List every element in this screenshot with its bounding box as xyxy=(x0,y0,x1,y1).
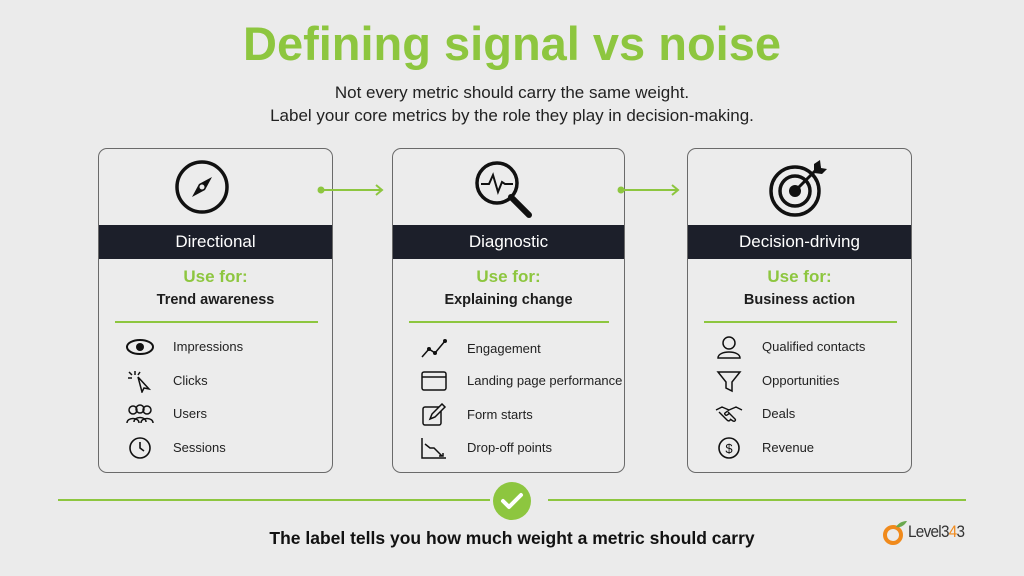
arrow 1 xyxy=(318,184,384,196)
icon: compass xyxy=(175,160,229,214)
panel: diagnostic: Diagnostic xyxy=(469,232,548,251)
item list: Drop-off points xyxy=(467,440,552,455)
subtitle xyxy=(270,83,754,125)
title: Defining signal vs noise xyxy=(243,17,781,70)
panel: decision-driving xyxy=(687,148,912,473)
item list: $ xyxy=(725,441,733,456)
item list: Form starts xyxy=(467,407,533,422)
footer message: The label tells you how much weight a metric should carry xyxy=(269,528,755,548)
panel: directional: Trend awareness xyxy=(157,292,274,308)
subtitle: Not every metric should carry the same weight. xyxy=(335,83,689,102)
item list: Deals xyxy=(762,406,795,421)
panel: decision-driving: Decision-driving xyxy=(739,232,860,251)
item list: Users xyxy=(173,406,207,421)
icon: magnifier xyxy=(475,161,532,218)
item list: Engagement xyxy=(467,341,541,356)
panel: directional: Use for: xyxy=(183,267,248,286)
item list: Qualified contacts xyxy=(762,339,865,354)
icon: check xyxy=(493,482,531,520)
item list: Landing page performance xyxy=(467,373,622,388)
item list xyxy=(716,336,865,459)
item list xyxy=(421,339,622,459)
item list: Revenue xyxy=(762,440,814,455)
panel: decision-driving: Business action xyxy=(744,292,855,308)
logo: Level343 xyxy=(908,522,964,541)
item list xyxy=(126,339,243,459)
item list: Opportunities xyxy=(762,373,839,388)
divider with check icon xyxy=(58,499,490,501)
panel: diagnostic xyxy=(392,148,625,473)
heading xyxy=(99,225,332,259)
panel: decision-driving: Use for: xyxy=(767,267,832,286)
subtitle: Label your core metrics by the role they play in decision-making. xyxy=(270,106,754,125)
panel: diagnostic: Use for: xyxy=(476,267,541,286)
icon: target xyxy=(769,160,827,217)
arrow 2 xyxy=(618,184,680,196)
heading: Directional xyxy=(175,232,256,251)
item list: Impressions xyxy=(173,339,243,354)
logo xyxy=(883,521,964,545)
panel: directional xyxy=(98,148,333,473)
item list: Sessions xyxy=(173,440,226,455)
panel: diagnostic: Explaining change xyxy=(444,292,573,308)
item list: Clicks xyxy=(173,373,208,388)
